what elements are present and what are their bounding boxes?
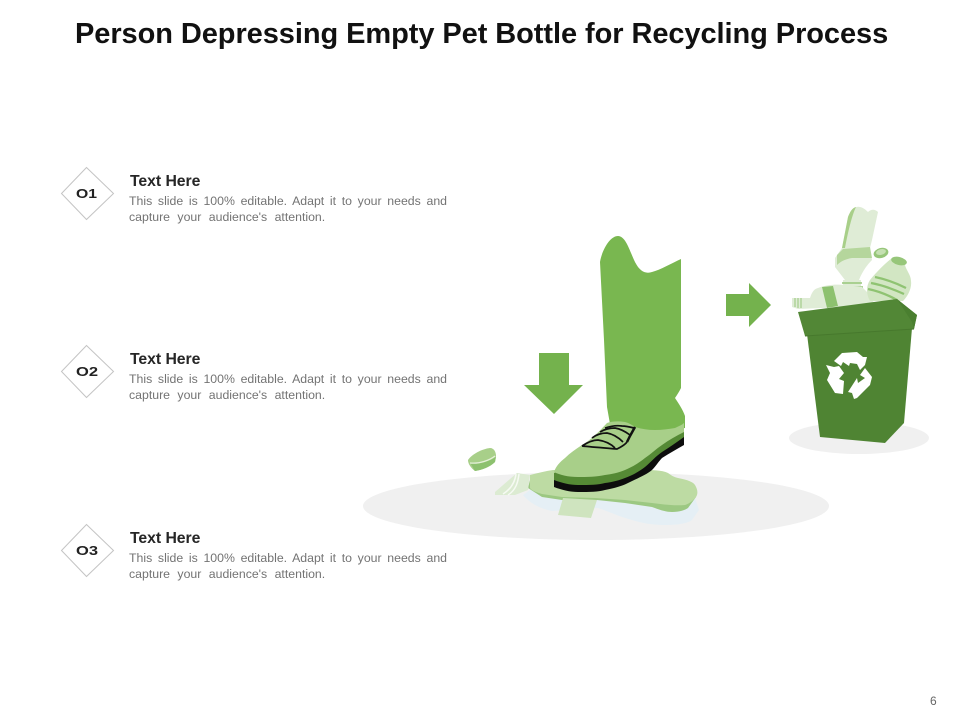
list item 02 (61, 345, 447, 402)
body text 01 (129, 194, 447, 224)
list item 01 (61, 167, 447, 224)
body text 02: This slide is 100% editable. Adapt it to your needs and (129, 372, 447, 386)
recycling bin (798, 299, 917, 443)
heading 02: Text Here (130, 351, 200, 368)
diamond badge 01 (61, 167, 114, 220)
second bottle cap (873, 246, 889, 260)
diamond badge 03: O3 (76, 543, 98, 558)
icon: down arrow (524, 353, 583, 414)
body text 01: This slide is 100% editable. Adapt it to your needs and (129, 194, 447, 208)
body text 02 (129, 372, 447, 402)
icon: recycling symbol (826, 352, 872, 399)
leg (600, 236, 685, 432)
heading 03: Text Here (130, 530, 200, 547)
body text 01: capture your audience's attention. (129, 210, 325, 224)
body text 03: This slide is 100% editable. Adapt it to your needs and (129, 551, 447, 565)
diamond badge 02 (61, 345, 114, 398)
list item 03 (61, 524, 447, 581)
heading 01: Text Here (130, 173, 200, 190)
page number: 6 (930, 694, 937, 708)
diamond badge 03 (61, 524, 114, 577)
shoe (554, 421, 684, 492)
body text 02: capture your audience's attention. (129, 388, 325, 402)
diamond badge 02: O2 (76, 364, 98, 379)
bin shadow (789, 422, 929, 454)
body text 03 (129, 551, 447, 581)
body text 03: capture your audience's attention. (129, 567, 325, 581)
diamond badge 01: O1 (76, 186, 97, 201)
icon: bottle cap (468, 448, 496, 471)
ground shadow (363, 472, 829, 540)
crushed bottle (495, 470, 699, 525)
bottles in bin (792, 207, 911, 309)
shoe laces (582, 426, 635, 449)
icon: right arrow (726, 283, 771, 327)
title: Person Depressing Empty Pet Bottle for Recycling Process (75, 18, 888, 50)
